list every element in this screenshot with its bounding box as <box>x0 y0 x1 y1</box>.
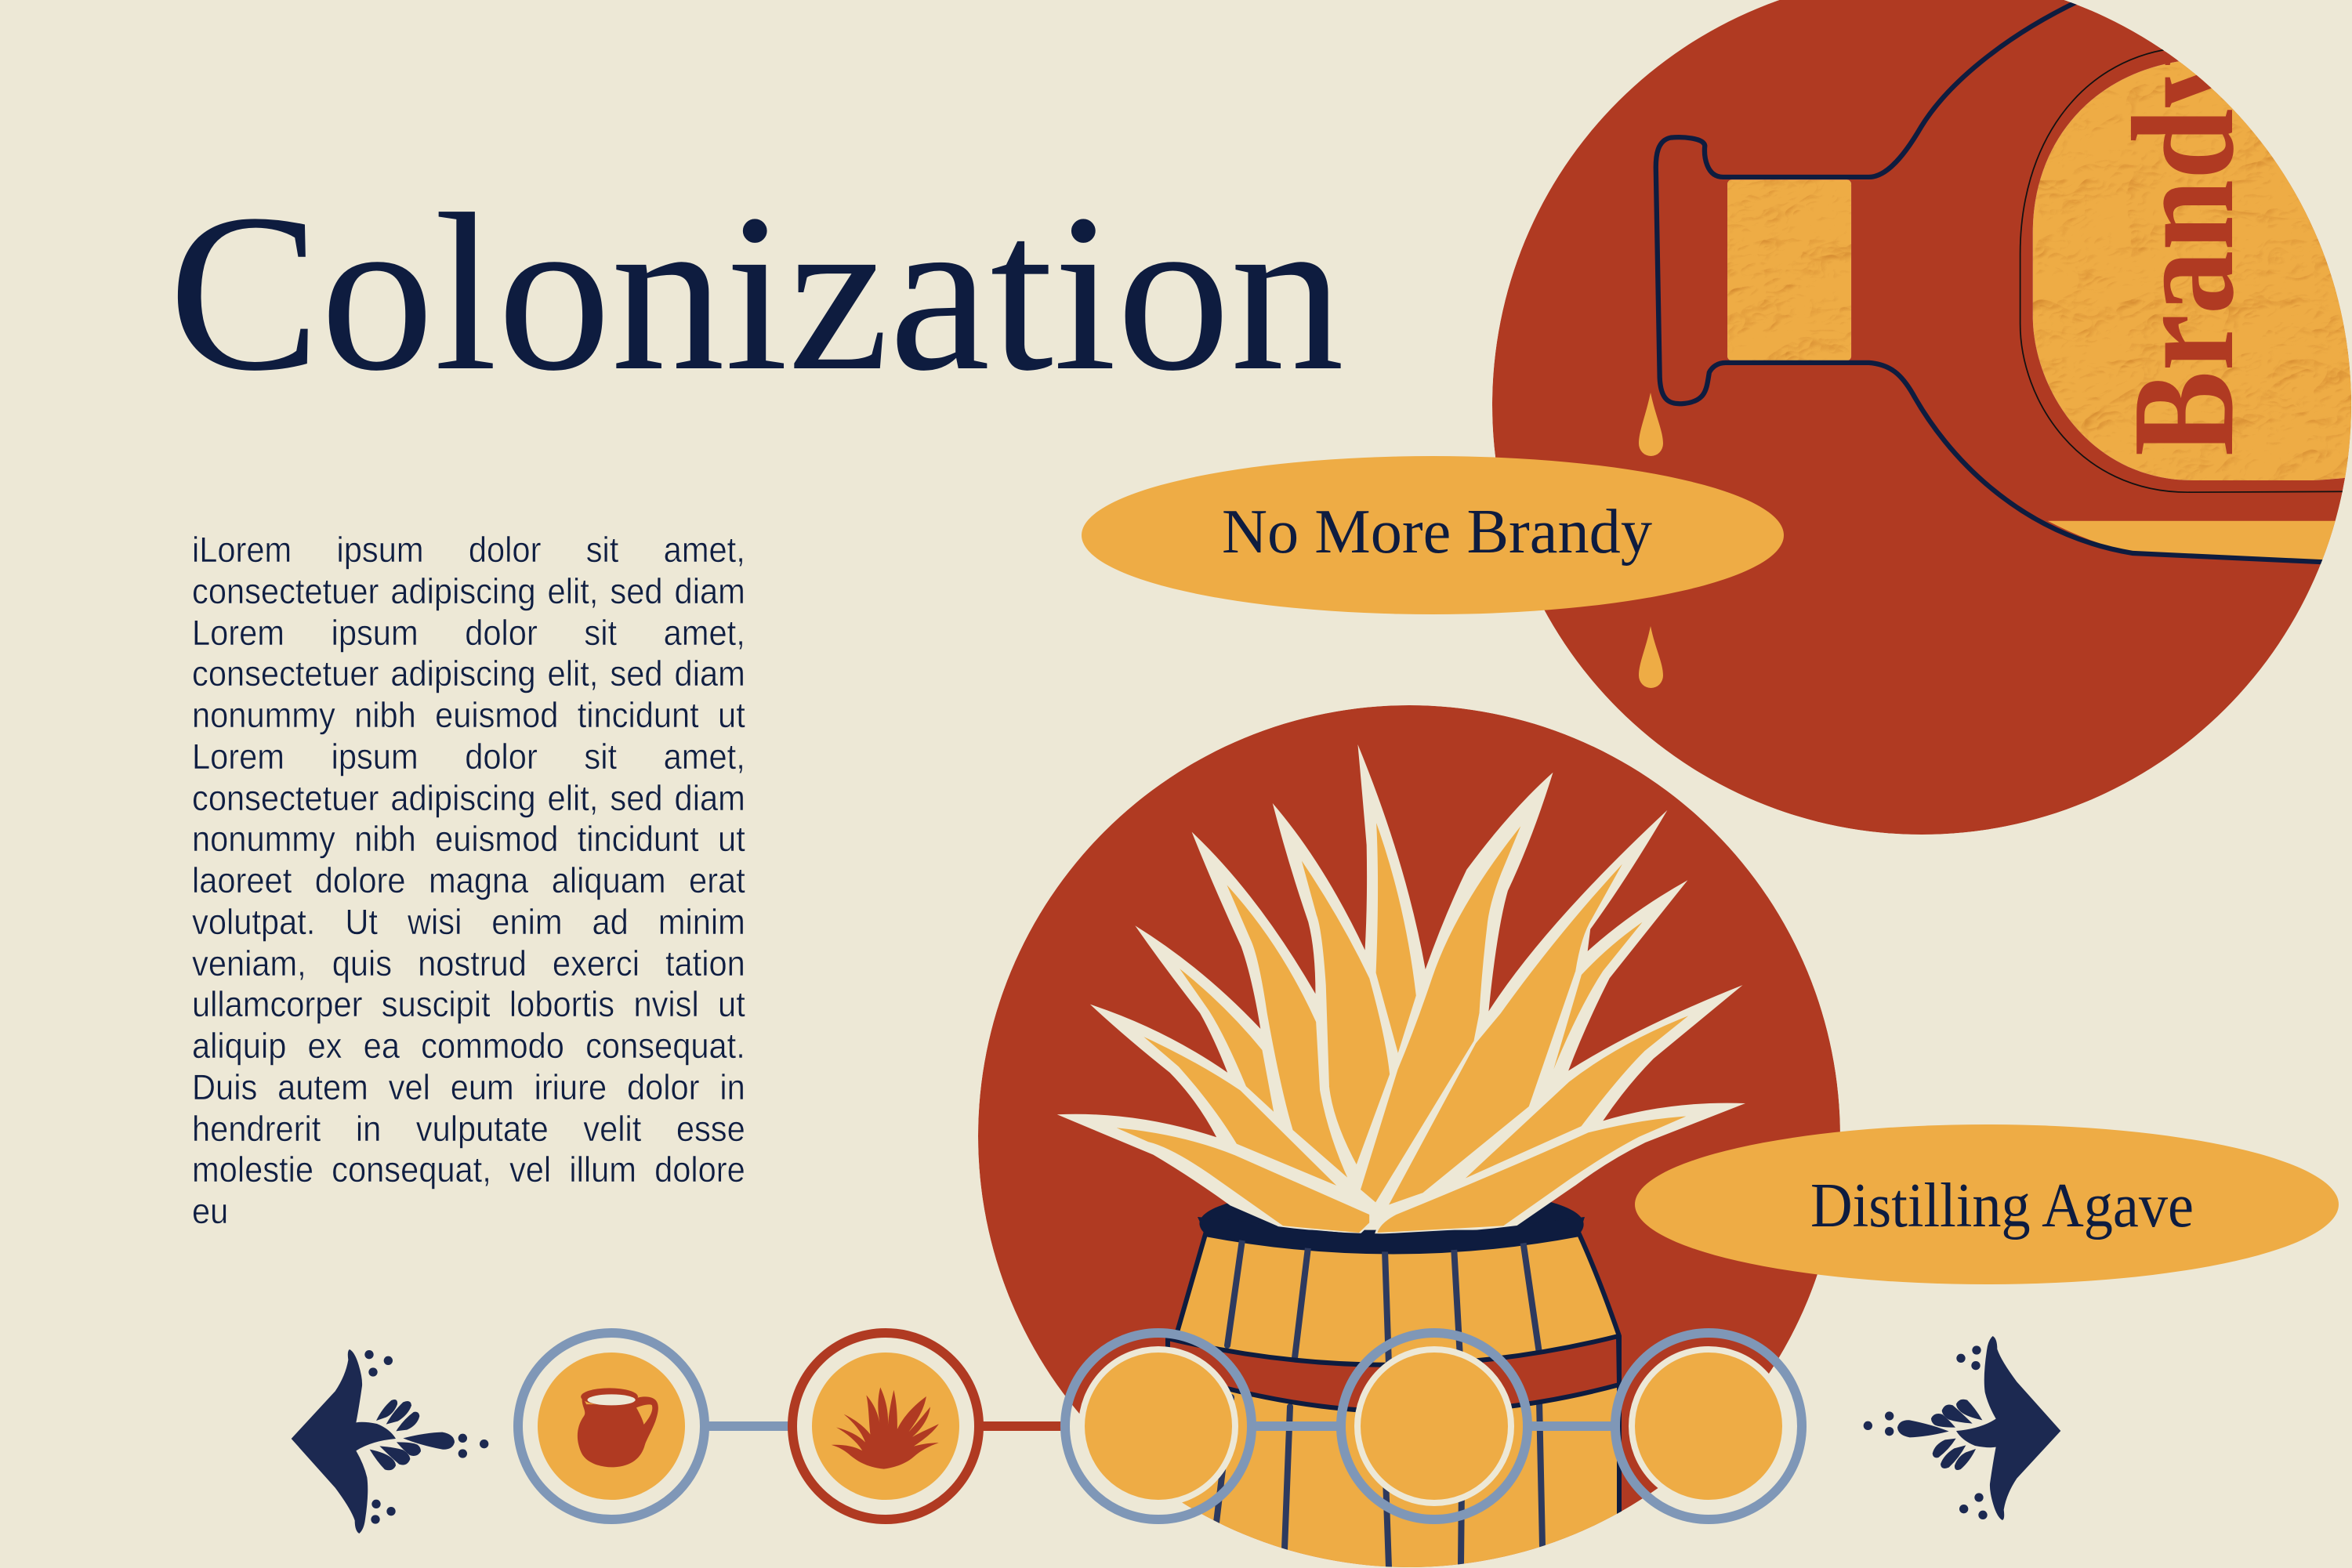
callout: distilling agave <box>1635 1124 2339 1284</box>
panel: agave barrel circle <box>978 705 1840 1568</box>
body text: nonummy nibh euismod tincidunt ut <box>192 695 745 735</box>
node 3 <box>1065 1333 1252 1519</box>
barrel band <box>1168 1336 1619 1412</box>
body text: molestie consequat, vel illum dolore <box>192 1150 745 1190</box>
agave plant <box>1057 744 1745 1233</box>
barrel rim back <box>1199 1202 1584 1233</box>
ornament: left <box>292 1349 488 1534</box>
bottle cork <box>1727 179 1851 360</box>
body text: Duis autem vel eum iriure dolor in <box>192 1067 745 1107</box>
node 4 <box>1341 1333 1528 1519</box>
body text: consectetuer adipiscing elit, sed diam <box>192 571 745 611</box>
body text: Lorem ipsum dolor sit amet, <box>192 613 745 652</box>
bottle label outline <box>2020 49 2352 492</box>
icon: falling drop 1 <box>1639 393 1663 456</box>
body text: Lorem ipsum dolor sit amet, <box>192 737 745 777</box>
timeline <box>292 1333 2060 1534</box>
callout: distilling agave: Distilling Agave <box>1810 1171 2194 1240</box>
body text: iLorem ipsum dolor sit amet, <box>192 530 745 570</box>
body text <box>192 530 745 1231</box>
icon: agave <box>832 1387 939 1469</box>
ornament: right <box>1864 1336 2060 1520</box>
callout: no more brandy: No More Brandy <box>1222 498 1652 567</box>
bottle label paper <box>2033 60 2352 480</box>
node 5 <box>1615 1333 1802 1519</box>
timeline connectors <box>705 1421 1615 1431</box>
body text: consectetuer adipiscing elit, sed diam <box>192 654 745 693</box>
icon: jug <box>578 1388 658 1467</box>
node 2: agave <box>792 1333 979 1519</box>
bottle label text: Brandy <box>2103 45 2264 456</box>
callout: no more brandy <box>1082 456 1784 614</box>
barrel rim front <box>1198 1217 1585 1252</box>
bottle outline <box>1656 0 2352 567</box>
body text: nonummy nibh euismod tincidunt ut <box>192 819 745 859</box>
body text: eu <box>192 1191 228 1231</box>
body text: ullamcorper suscipit lobortis nvisl ut <box>192 984 745 1024</box>
body text: hendrerit in vulputate velit esse <box>192 1108 745 1149</box>
title: Colonization <box>169 168 1344 418</box>
body text: laoreet dolore magna aliquam erat <box>192 860 745 900</box>
barrel staves <box>1216 1240 1542 1567</box>
body text: volutpat. Ut wisi enim ad minim <box>192 902 745 942</box>
icon: falling drop 2 <box>1639 626 1663 688</box>
barrel body <box>1168 1234 1619 1568</box>
body text: veniam, quis nostrud exerci tation <box>192 943 745 983</box>
panel: brandy bottle circle <box>1492 0 2352 835</box>
body text: consectetuer adipiscing elit, sed diam <box>192 777 745 818</box>
body text: aliquip ex ea commodo consequat. <box>192 1026 745 1066</box>
bottle stripe <box>2047 520 2336 562</box>
node 1: jug <box>518 1333 705 1519</box>
